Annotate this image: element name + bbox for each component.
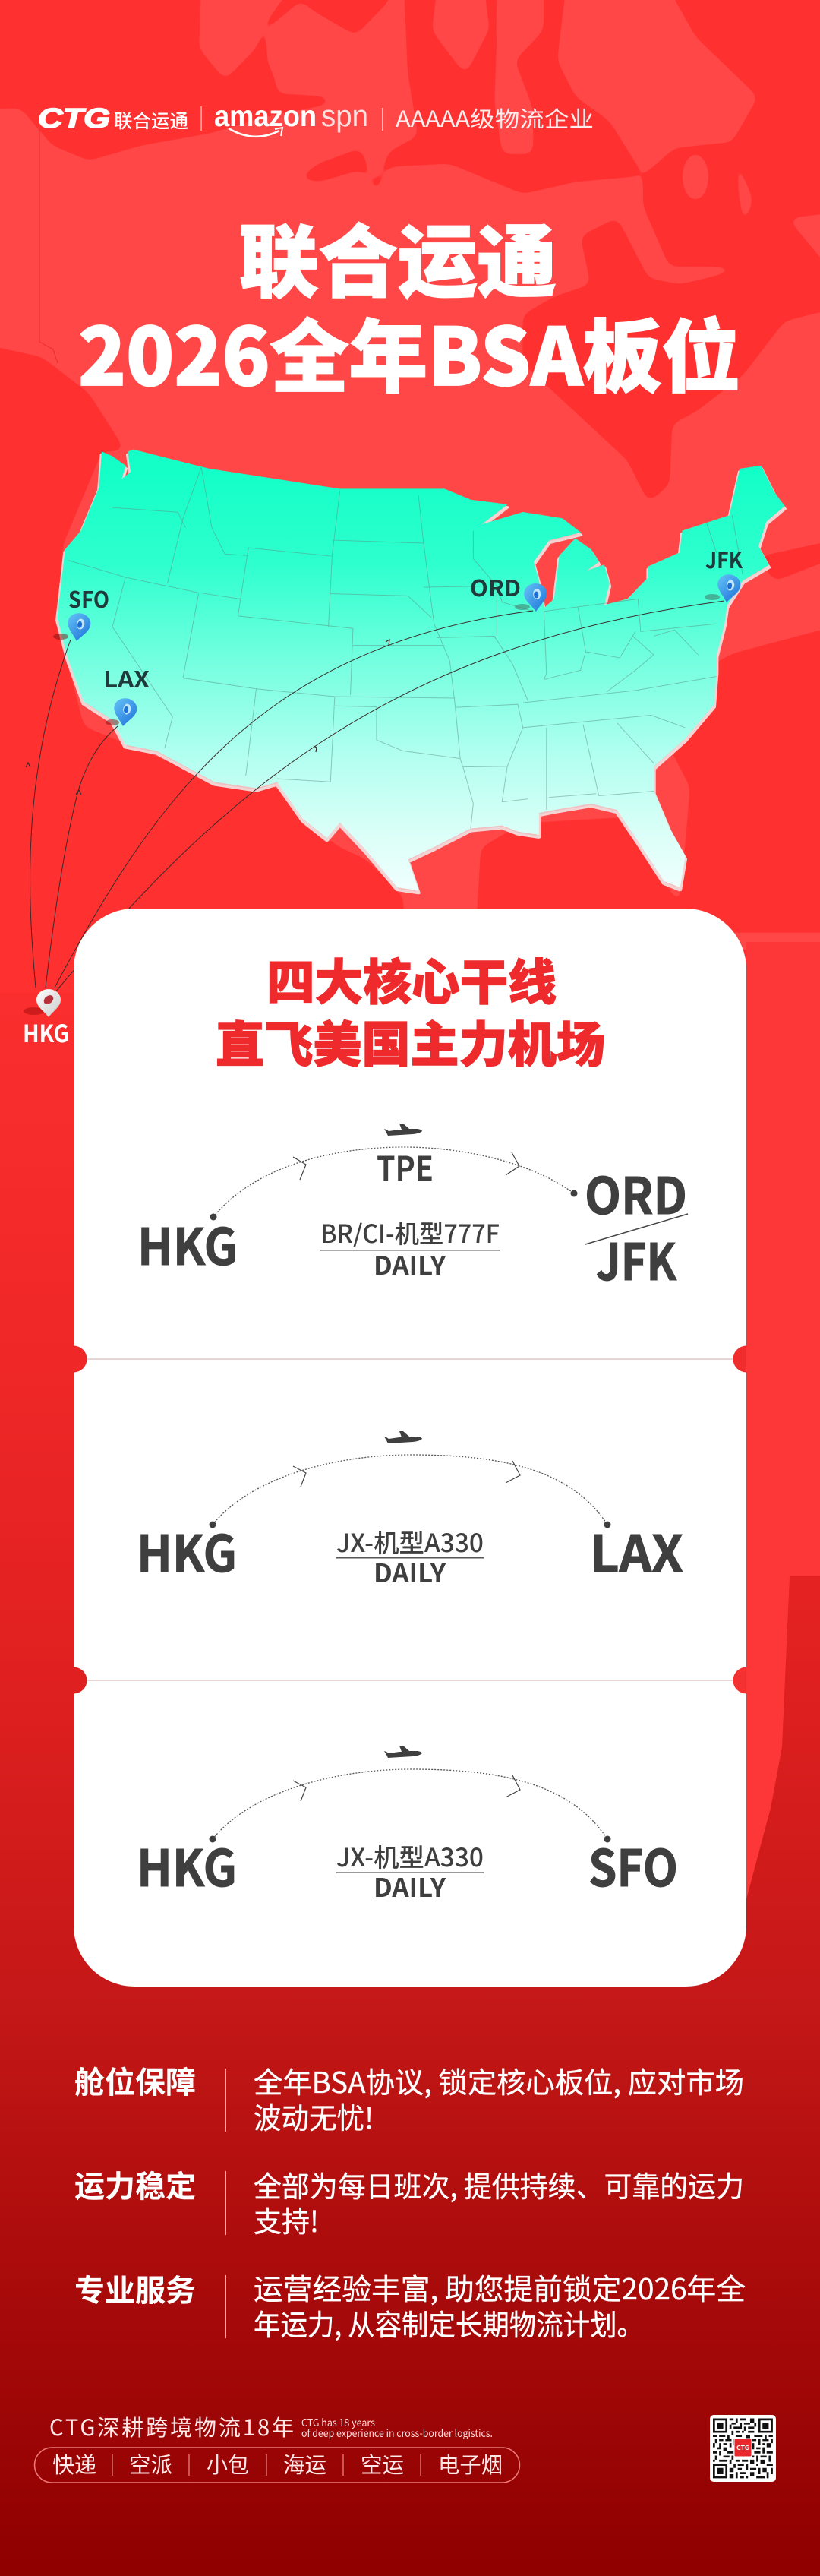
footer service pill: 海运 [283,2448,326,2480]
footer tagline: CTG深耕跨境物流18年 [49,2410,294,2442]
card heading [216,944,605,1076]
map pin: ORD: ORD [470,570,521,603]
QR code [710,2415,776,2482]
map pin: HKG: HKG [23,1015,69,1050]
US map [58,450,784,893]
route 2: HKG LAX: DAILY [374,1553,446,1590]
benefit: 专业服务 [74,2266,746,2344]
benefit: 运力稳定: 全部为每日班次, 提供持续、可靠的运力 [254,2164,744,2205]
footer tagline [49,2410,493,2442]
map pin: JFK [705,542,743,604]
route 3: HKG SFO: SFO [588,1828,678,1901]
benefit: 专业服务: 年运力, 从容制定长期物流计划。 [254,2302,644,2344]
benefit: 舱位保障: 舱位保障 [74,2058,196,2102]
logo: CTG 联合运通 [38,103,188,134]
benefit: 运力稳定 [74,2162,744,2240]
route 2: HKG LAX: HKG [137,1514,237,1587]
card heading: 直飞美国主力机场 [216,1007,605,1076]
route 3: HKG SFO: DAILY [374,1867,446,1904]
footer tagline: CTG has 18 years [301,2414,375,2429]
route 1: HKG TPE ORD/JFK: TPE [377,1142,434,1190]
logo: amazon spn: spn [321,100,368,133]
benefit: 舱位保障: 波动无忧! [254,2095,374,2137]
footer service pill: 空派 [129,2448,172,2480]
route 2: HKG LAX [137,1431,683,1590]
route 1: HKG TPE ORD/JFK: JFK [596,1222,677,1295]
benefit: 运力稳定: 运力稳定 [74,2162,196,2206]
footer service pill [35,2448,519,2483]
footer service pill: 小包 [207,2448,249,2480]
title [78,198,740,408]
map pin: HKG [23,989,69,1050]
route 1: HKG TPE ORD/JFK [137,1124,688,1295]
title: 联合运通 [239,198,557,313]
benefit: 舱位保障: 全年BSA协议, 锁定核心板位, 应对市场 [254,2059,744,2101]
footer tagline: of deep experience in cross-border logistics. [301,2425,493,2440]
footer service pill: 电子烟 [438,2448,503,2480]
footer service pill: 快递 [52,2448,96,2480]
benefit: 专业服务: 专业服务 [74,2266,196,2310]
route 1: HKG TPE ORD/JFK: HKG [137,1207,238,1280]
logo tagline: AAAAA级物流企业 [396,102,594,134]
map pin: JFK: JFK [705,542,743,575]
QR code: CTG [736,2444,749,2452]
header logo row [38,100,594,137]
logo: CTG 联合运通: CTG [38,103,110,134]
logo: amazon spn: amazon [214,100,317,133]
state borders [68,467,743,828]
route 1: HKG TPE ORD/JFK: BR/CI-机型777F [320,1214,500,1250]
panel: routes card [74,909,746,1987]
route 2: HKG LAX: JX-机型A330 [336,1523,484,1560]
logo: amazon spn [214,100,368,137]
logo: CTG 联合运通: 联合运通 [114,107,188,134]
route 3: HKG SFO: HKG [137,1828,237,1901]
benefit: 舱位保障 [74,2058,744,2137]
benefit: 运力稳定: 支持! [254,2198,319,2240]
title: 2026全年BSA板位 [78,293,740,408]
benefit: 专业服务: 运营经验丰富, 助您提前锁定2026年全 [254,2266,746,2308]
map pin: LAX [103,661,150,728]
route 1: HKG TPE ORD/JFK: DAILY [374,1245,446,1282]
footer service pill: 空运 [361,2448,404,2480]
map pin: SFO: SFO [68,581,109,615]
card heading: 四大核心干线 [266,944,557,1014]
card notches [74,1346,746,1694]
flight paths to the US [26,601,724,993]
map pin: SFO [53,581,109,643]
map pin: ORD [470,570,547,612]
route 1: HKG TPE ORD/JFK: ORD [585,1156,687,1229]
route 2: HKG LAX: LAX [590,1514,683,1587]
map pin: LAX: LAX [103,661,150,694]
route 3: HKG SFO [137,1746,678,1904]
route 3: HKG SFO: JX-机型A330 [336,1838,484,1874]
